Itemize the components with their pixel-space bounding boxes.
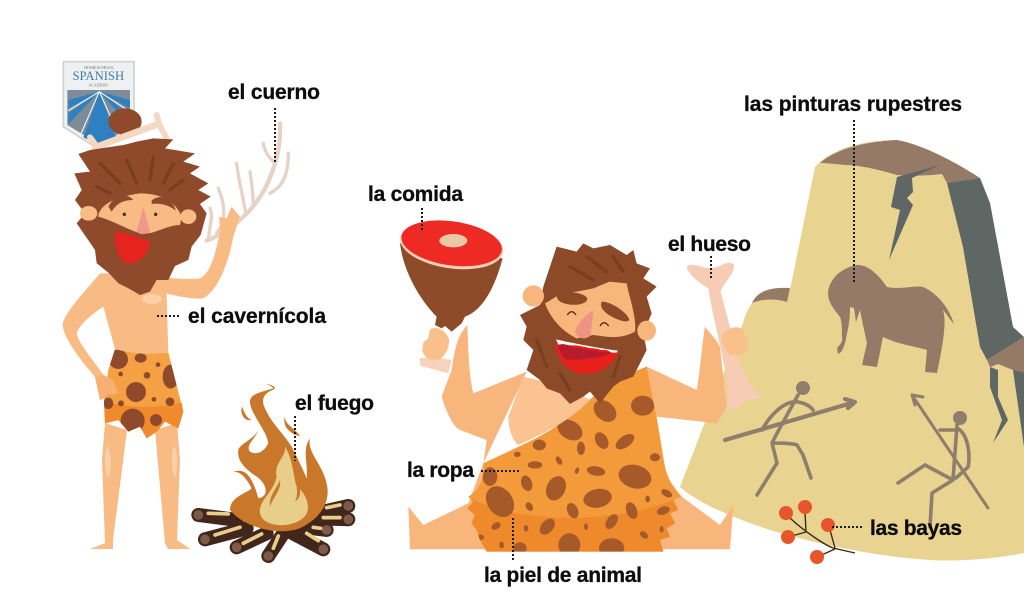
rock lower crack: [990, 367, 1008, 443]
mouth: [115, 232, 151, 263]
eyebrows: [557, 292, 587, 305]
ears: [80, 206, 97, 221]
label: el hueso: [668, 233, 751, 280]
hair and beard: [74, 138, 211, 295]
logs: [198, 506, 348, 556]
label: el fuego: el fuego: [295, 392, 374, 415]
inner flame: [260, 447, 308, 525]
bun and bone: [108, 108, 142, 135]
berries: [779, 500, 855, 564]
label: la piel de animal: la piel de animal: [484, 564, 642, 587]
log ends: [193, 501, 354, 561]
loincloth: [95, 349, 183, 438]
seated caveman: [397, 214, 762, 558]
label: el fuego: [295, 392, 374, 461]
label: la ropa: la ropa: [407, 459, 474, 482]
fringe: [560, 255, 630, 295]
label: las pinturas rupestres: las pinturas rupestres: [744, 93, 962, 116]
outer flame: [230, 384, 328, 531]
raised arm: [157, 207, 240, 299]
right hand: [721, 327, 748, 355]
left hand fingers: [422, 328, 449, 361]
chest patch: [142, 294, 162, 304]
chest skin: [508, 377, 590, 445]
rock top band: [820, 140, 980, 183]
label: la comida: la comida: [368, 183, 463, 206]
mouth: [556, 339, 618, 374]
meat: [397, 214, 506, 332]
rock lower shadow: [1013, 370, 1024, 447]
knee shading: [105, 445, 177, 478]
logo: Homeschool Spanish Academy: [63, 62, 134, 150]
ears: [523, 285, 544, 307]
hair strands: [97, 157, 183, 193]
arms and legs: [408, 325, 733, 549]
left hand bone: [419, 357, 452, 373]
torso and left arm: [63, 273, 168, 400]
eyes: [567, 312, 609, 326]
label: la ropa: [407, 459, 519, 482]
standing caveman: [63, 108, 288, 549]
legs: [90, 423, 190, 549]
head with hair and beard: [74, 108, 211, 295]
face: [545, 280, 635, 338]
rock top crack: [889, 165, 940, 260]
label: las bayas: las bayas: [870, 517, 962, 540]
campfire: [193, 384, 354, 561]
label: el cuerno: [228, 81, 320, 162]
teeth: [556, 339, 618, 353]
nose: [575, 310, 593, 338]
antler: [207, 123, 288, 241]
rock lower band: [987, 337, 1024, 372]
inner flame stripes: [270, 480, 300, 507]
dress: [467, 367, 682, 558]
eyes: [123, 213, 126, 216]
mouth shade: [558, 343, 613, 360]
rock shadow side: [947, 178, 1024, 360]
logo: Homeschool Spanish Academy: SPANISH: [73, 69, 124, 83]
logo: Homeschool Spanish Academy: ACADEMY: [88, 83, 109, 88]
hair and beard: [520, 243, 657, 404]
label: el hueso: el hueso: [668, 233, 751, 256]
hair strands: [537, 257, 623, 390]
eyebrows: [108, 196, 133, 212]
painting: hunter with spear, right: [898, 395, 988, 527]
cave painting rock: [680, 140, 1024, 564]
small rock cap: [752, 288, 790, 303]
right bone: [687, 263, 762, 411]
label: el cavernícola: el cavernícola: [188, 305, 326, 328]
painting: hunter with spear, left: [725, 381, 855, 495]
rock body: [680, 140, 1024, 561]
label: el cuerno: el cuerno: [228, 81, 320, 104]
nose: [137, 207, 150, 234]
label: la comida: [368, 183, 463, 230]
log highlights: [208, 505, 340, 548]
painting: elephant: [828, 265, 954, 373]
flame wisps: [241, 407, 300, 436]
logo: Homeschool Spanish Academy: HOMESCHOOL: [84, 65, 114, 70]
face: [98, 193, 182, 234]
